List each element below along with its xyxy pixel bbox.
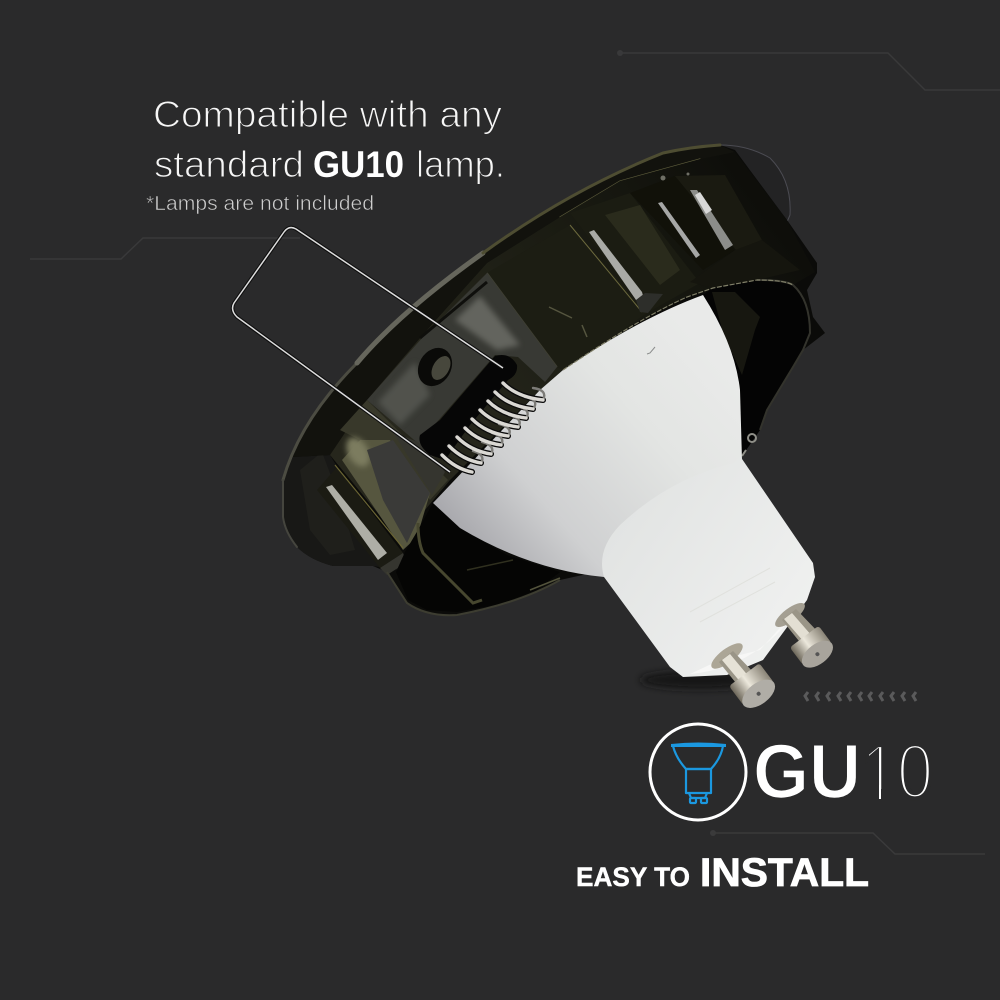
GU10 label [753, 729, 933, 815]
product photo: recessed fitting with GU10 lamp [233, 145, 838, 714]
decorative circuit line: left [30, 238, 300, 259]
heading: compatibility text: GU10 [313, 144, 404, 185]
ring central panel scuffs [549, 307, 587, 337]
gray mounting plate [367, 273, 557, 445]
heading: compatibility text: Compatible with any [153, 94, 503, 135]
heading: compatibility text [153, 94, 505, 185]
pin right [772, 599, 838, 673]
ring tab 3 [675, 175, 800, 288]
plate fold lines [420, 282, 487, 338]
lamp drop shadow [640, 671, 760, 689]
icon: GU10 lamp in circle [650, 724, 746, 820]
heading: compatibility text: standard [154, 144, 304, 185]
tagline: easy to install: INSTALL [700, 851, 869, 895]
side clip ring [742, 434, 756, 456]
translucent backplate edge [720, 145, 790, 222]
coil shadow strands [442, 383, 543, 472]
ring edge line [487, 273, 557, 367]
wire spring clip [233, 228, 503, 472]
ring tab 1 [570, 193, 700, 313]
base end highlight [690, 600, 805, 674]
fitting silhouette [283, 145, 825, 615]
right recess [703, 280, 810, 456]
chevron strip [805, 692, 916, 701]
lamp body [433, 295, 742, 577]
olive camo panel [342, 440, 430, 550]
ring central panel [487, 225, 647, 370]
tagline: easy to install [576, 851, 869, 895]
ring wall [330, 152, 815, 540]
gray camo panel [367, 440, 430, 543]
note: lamps not included: *Lamps are not included [146, 193, 374, 215]
tagline: easy to install: EASY TO [576, 862, 690, 892]
pin left [708, 639, 780, 714]
flange rim highlights [283, 145, 720, 547]
ring tab 2 [630, 176, 735, 270]
decorative circuit line: top right [617, 50, 1000, 90]
lower recess [396, 503, 560, 612]
light olive patch [341, 433, 375, 471]
spring coil [442, 383, 544, 472]
right recess lip [757, 280, 810, 430]
lower post [317, 465, 407, 575]
small highlight spots [660, 172, 690, 180]
flange lower-left face [283, 455, 400, 570]
lamp neck [602, 456, 815, 677]
spring slot [419, 355, 517, 460]
coil back strands [473, 388, 544, 463]
decorative circuit line: bottom right [710, 830, 985, 854]
scratch on lamp [647, 347, 655, 354]
lamp base pins [708, 599, 838, 714]
ring lower edge highlight [563, 280, 793, 370]
textured strip next to wire [393, 432, 445, 495]
GU10 label: GU [753, 729, 861, 815]
lower recess lip [387, 523, 560, 615]
plate highlights [378, 296, 520, 425]
heading: compatibility text: lamp. [416, 144, 505, 185]
olive area [340, 400, 448, 500]
flange rim band [293, 145, 735, 457]
coil front strands [442, 383, 543, 472]
GU10 label: 10 [861, 729, 933, 815]
base scuff marks [690, 568, 775, 622]
right recess inner tab [712, 292, 760, 375]
screw hole [411, 342, 459, 392]
